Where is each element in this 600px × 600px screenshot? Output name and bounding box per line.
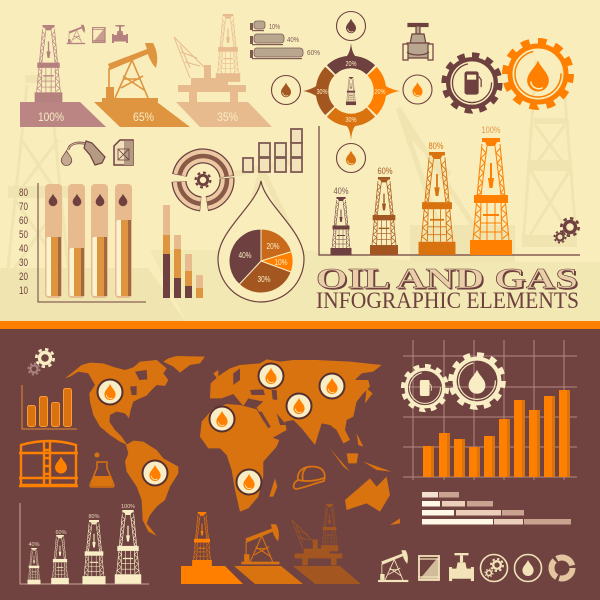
map pins: [98, 364, 344, 494]
icon: cream fuel gear: [403, 366, 447, 410]
derricks: [330, 138, 512, 256]
cream derrick labels: 100%: [121, 504, 135, 510]
pie slices: [229, 229, 293, 293]
chart: stacked bars: [163, 205, 203, 298]
bars: [423, 390, 570, 477]
drop circles: [272, 12, 432, 172]
icon: hard hat: [294, 466, 325, 489]
derrick 100%: 100%: [38, 110, 64, 124]
greenland: [163, 356, 205, 373]
ring labels: 30%: [346, 117, 356, 124]
tube drops: [49, 194, 127, 206]
icon: cream oil gear: [451, 355, 503, 407]
axes: [38, 183, 146, 302]
axis labels: 70: [19, 201, 28, 213]
ring diagram with pointers: [272, 12, 432, 172]
chart: segmented donut with gear: [174, 151, 232, 209]
ring labels: 20%: [346, 61, 356, 68]
heading: subtitle: INFOGRAPHIC ELEMENTS: [316, 288, 579, 313]
icon: fuel gear: [444, 55, 500, 111]
chart: derrick bars: [319, 125, 580, 256]
derrick labels: 100%: [482, 125, 501, 136]
heading: oil and gas title: OIL AND GAS: [318, 264, 580, 296]
icon: stacked barrels: [243, 129, 302, 172]
pie labels: 20%: [266, 242, 280, 251]
tanker bars: 60%: [307, 48, 320, 57]
axis labels: 30: [19, 257, 28, 269]
map water details: [130, 368, 287, 428]
offshore platform 35%: [174, 14, 272, 127]
ring labels: 30%: [316, 89, 328, 96]
icon: jerry can: [114, 140, 133, 165]
tanker bars: 40%: [287, 35, 299, 44]
icon: small gears: [554, 218, 579, 243]
axis labels: [19, 187, 28, 297]
tube backgrounds: [45, 184, 132, 298]
tanker bars: 10%: [269, 22, 280, 31]
panel: bottom derrick, pump, platform: [181, 504, 361, 584]
south america: [125, 441, 178, 536]
cream derrick labels: 40%: [28, 542, 40, 548]
icon: oil gear: [505, 41, 571, 107]
axis labels: 50: [19, 229, 28, 241]
icon: storage tank: [19, 441, 78, 486]
north america: [65, 360, 168, 445]
derrick labels: [334, 125, 501, 197]
ring labels: [316, 61, 386, 124]
ring segments: [310, 50, 392, 132]
heading: oil and gas title: OIL AND GAS: [316, 263, 578, 295]
islands: [173, 360, 400, 525]
chart: cream derricks: [20, 503, 149, 584]
pump jack 65%: [94, 43, 190, 127]
offshore platform 35%: 35%: [217, 110, 238, 124]
cream derrick labels: [28, 504, 135, 548]
tanker bars: [250, 21, 320, 59]
pump jack icon: [378, 550, 408, 582]
pie labels: [238, 242, 288, 284]
axis labels: 40: [19, 243, 28, 255]
eurasia: [210, 359, 382, 445]
world map: [65, 356, 400, 536]
cream derrick labels: 80%: [88, 514, 100, 520]
derrick labels: 40%: [334, 186, 349, 197]
axis labels: 60: [19, 215, 28, 227]
chart: horizontal stacked bars: [422, 492, 571, 524]
derrick 100%: [20, 25, 106, 127]
icons: small pump, barrel and valve: [67, 25, 128, 44]
ring labels: 20%: [374, 89, 386, 96]
barrel icon: [418, 556, 440, 580]
chart: tube bars: [19, 183, 146, 302]
icon: flask: [90, 452, 114, 487]
chart: orange bars with grid: [403, 340, 577, 480]
africa: [200, 404, 279, 512]
panel: percentage derrick, pump, platform: [20, 14, 272, 127]
icon: large valve: [403, 24, 433, 60]
gears circle icon: [480, 554, 508, 582]
icon: fuel nozzle: [61, 141, 105, 166]
heading: oil and gas title: [316, 263, 580, 296]
derrick labels: 60%: [378, 166, 393, 177]
centre derrick: [346, 77, 356, 105]
icon: cream gears: [28, 349, 54, 375]
drop circle icon: [514, 554, 542, 582]
pointers: [303, 43, 400, 140]
tube fills: [46, 220, 131, 296]
cream derrick labels: 60%: [55, 530, 67, 536]
derrick labels: 80%: [428, 141, 444, 152]
background silhouettes: [0, 60, 600, 321]
australia: [345, 477, 390, 512]
axis labels: 20: [19, 271, 28, 283]
axis labels: 10: [19, 285, 28, 297]
recycle icon: [552, 558, 572, 578]
top cream background: [0, 0, 600, 321]
pie labels: 10%: [274, 258, 288, 267]
chart: pie in oil drop: [218, 181, 304, 302]
pie labels: 40%: [238, 251, 252, 260]
pump jack 65%: 65%: [133, 110, 154, 124]
icon row: industry symbols: [378, 550, 572, 582]
bottom brown background: [0, 329, 600, 600]
chart: small orange bars: [22, 385, 77, 429]
pie labels: 30%: [258, 275, 270, 284]
axis labels: 80: [19, 187, 28, 199]
orange divider band: [0, 321, 600, 329]
valve icon: [449, 553, 474, 581]
